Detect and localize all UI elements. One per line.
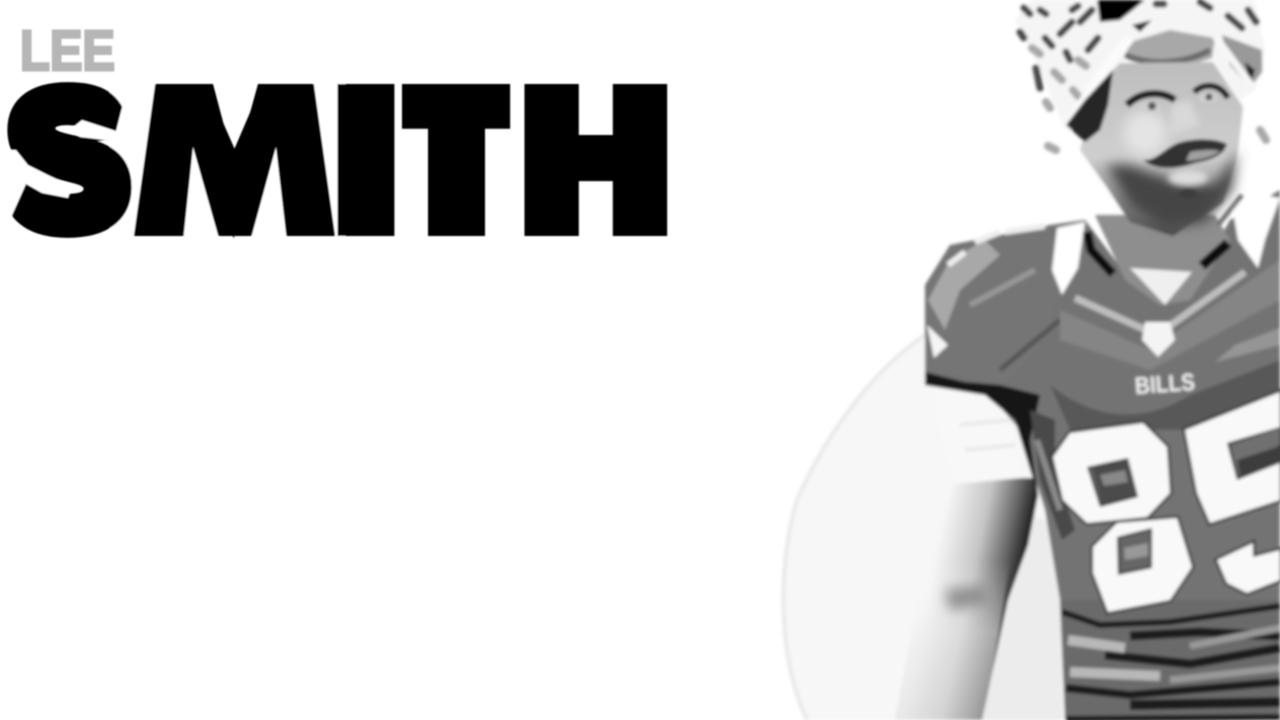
first name: LEE: LEE	[20, 19, 115, 83]
hair	[1066, 70, 1113, 142]
jersey wrinkles	[1062, 606, 1280, 719]
jersey	[925, 190, 1280, 720]
title: player name	[0, 19, 668, 264]
last name: SMITH: M	[128, 56, 340, 264]
jersey chest shading	[1050, 360, 1280, 430]
last name: SMITH: T	[410, 56, 502, 264]
collar shield	[1142, 322, 1175, 357]
neck and undershirt	[1095, 215, 1230, 305]
lower jersey folds	[1060, 600, 1280, 720]
last name: SMITH: S	[8, 56, 127, 264]
collar	[1052, 195, 1280, 335]
last name: SMITH: I	[337, 55, 395, 264]
photo: football player in jersey 85	[783, 0, 1280, 720]
face	[1066, 62, 1243, 236]
last name: SMITH	[0, 55, 668, 264]
jersey number 85	[1053, 392, 1280, 612]
last name: SMITH: H	[524, 56, 668, 264]
sleeve edge	[925, 372, 1040, 495]
helmet	[1015, 0, 1266, 150]
shoulder pad	[925, 226, 1060, 390]
wordmark on chest: BILLS	[1134, 369, 1196, 400]
eyes	[1127, 94, 1175, 105]
mouth	[1143, 139, 1227, 168]
raised arm	[783, 335, 1065, 720]
side seam next to the number	[1030, 410, 1075, 540]
goatee	[1179, 188, 1197, 198]
